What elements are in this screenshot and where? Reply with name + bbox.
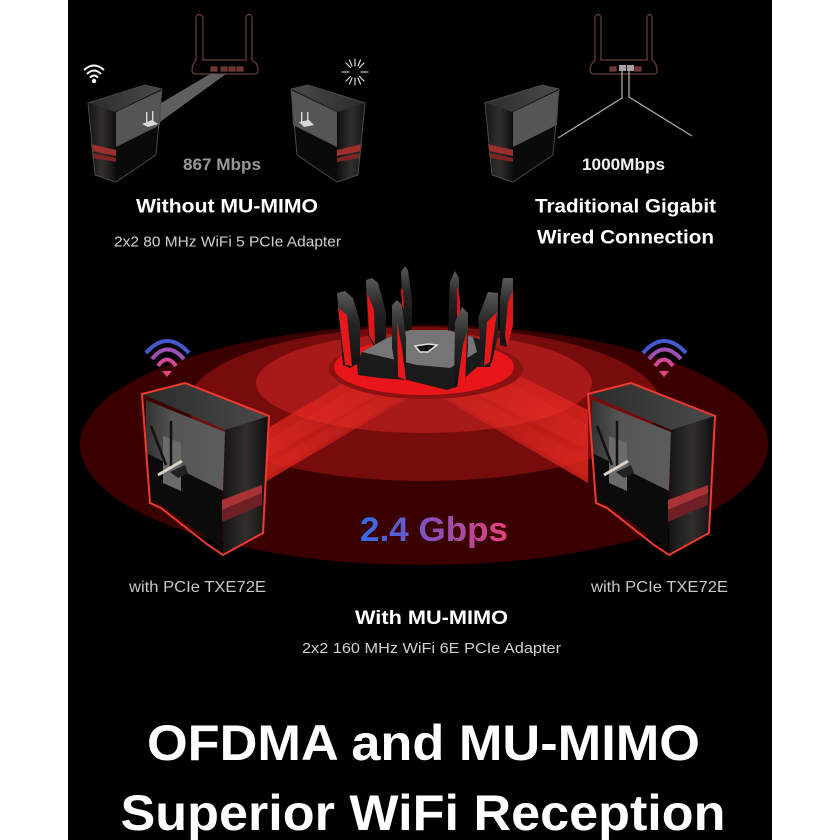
panel: traditional gigabit wired	[485, 14, 840, 248]
router top plate	[362, 330, 477, 368]
middle signal ring	[188, 327, 660, 481]
heading: Without MU-MIMO	[136, 196, 318, 218]
icon: white wifi	[84, 66, 104, 82]
icon: colour wifi left	[146, 341, 189, 377]
icon: colour wifi right	[643, 341, 686, 377]
icon: computer tower right with adapter	[588, 383, 715, 555]
icon: computer tower left with adapter	[142, 383, 269, 555]
icon: computer tower right	[291, 85, 365, 182]
router halo	[334, 339, 514, 395]
icon: router outline	[192, 14, 258, 74]
speed label: 867 Mbps	[183, 155, 261, 174]
icon: mini router inside left tower	[142, 111, 158, 127]
icon: mini router inside right tower	[299, 112, 314, 127]
active ports	[619, 65, 634, 71]
signal beam left	[265, 366, 430, 482]
router halo shadow	[329, 339, 523, 399]
icon: computer tower left	[485, 85, 559, 182]
icon: computer tower left	[88, 85, 162, 182]
wireless beam	[160, 74, 226, 122]
heading: with MU-MIMO: With MU-MIMO	[355, 607, 508, 629]
left adapter label: with PCIe TXE72E	[128, 579, 266, 596]
front antennas	[337, 291, 498, 388]
right adapter label: with PCIe TXE72E	[590, 579, 728, 596]
icon: router outline	[590, 14, 657, 74]
heading second line: Wired Connection	[537, 226, 714, 248]
speed label: 1000Mbps	[582, 155, 665, 174]
ethernet cables	[558, 71, 692, 138]
title	[120, 715, 726, 840]
router base	[357, 330, 495, 390]
panel: without MU-MIMO	[84, 14, 368, 250]
icon: gaming router	[337, 266, 513, 390]
title: OFDMA and MU-MIMO	[147, 715, 700, 771]
inner signal ring	[256, 333, 592, 433]
adapter caption: 2x2 80 MHz WiFi 5 PCIe Adapter	[114, 234, 341, 250]
adapter caption: 2x2 160 MHz WiFi 6E PCIe Adapter	[302, 640, 561, 657]
outer signal ring	[80, 325, 768, 565]
icon: loading spinner	[342, 59, 368, 85]
title: Superior WiFi Reception	[120, 785, 726, 840]
panel: with MU-MIMO signal field	[80, 325, 768, 565]
back antennas	[366, 266, 513, 348]
heading: Traditional Gigabit	[535, 196, 717, 218]
signal beam right	[420, 355, 588, 483]
router logo	[415, 344, 437, 352]
speed value: 2.4 Gbps	[360, 511, 508, 549]
